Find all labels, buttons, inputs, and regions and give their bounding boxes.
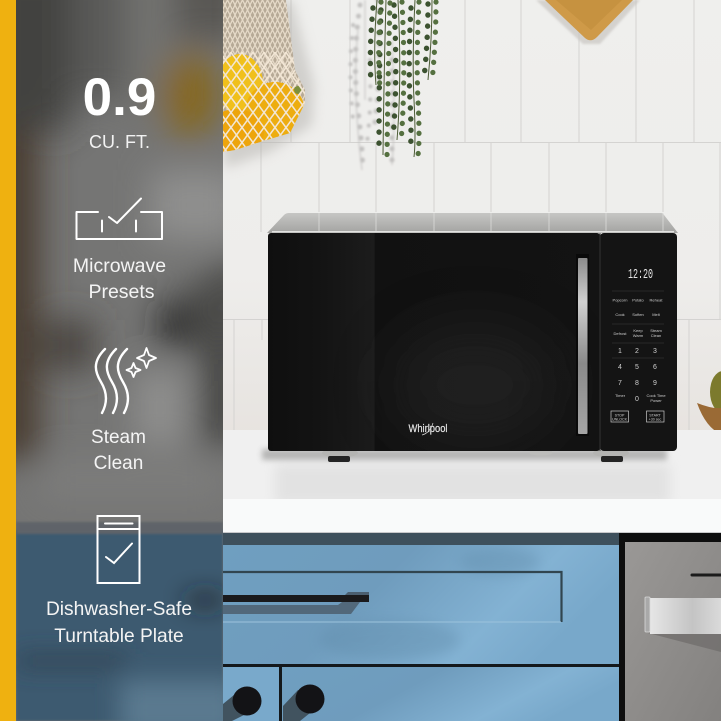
keypad labels: 2 xyxy=(635,348,639,355)
whirlpool logo: Whirlpool xyxy=(408,423,448,435)
icon: microwave presets xyxy=(76,198,162,239)
keypad labels: STOP xyxy=(615,414,625,418)
keypad labels: 8 xyxy=(635,380,639,387)
keypad labels: Power xyxy=(650,398,662,403)
keypad labels: Cook Time xyxy=(646,393,666,398)
cutting board xyxy=(536,0,640,44)
keypad labels: Soften xyxy=(632,312,644,317)
clock display: 12:20 xyxy=(628,267,653,283)
keypad labels: 9 xyxy=(653,380,657,387)
keypad labels: +30 sec xyxy=(649,418,662,422)
keypad labels: 1 xyxy=(618,348,622,355)
hanging plant xyxy=(370,0,436,157)
countertop xyxy=(223,430,721,534)
keypad labels xyxy=(612,298,666,422)
frosted background xyxy=(16,0,223,721)
keypad labels: Defrost xyxy=(614,331,627,336)
blue cabinets xyxy=(223,533,621,721)
capacity value: 0.9 xyxy=(83,68,156,127)
drawer handle xyxy=(223,592,369,614)
keypad labels: 0 xyxy=(635,396,639,403)
icon: dishwasher safe xyxy=(98,516,140,583)
lower doors xyxy=(223,667,619,721)
keypad labels: UNLOCK xyxy=(612,418,628,422)
keypad labels: Reheat xyxy=(650,298,663,302)
keypad labels: Melt xyxy=(652,312,661,317)
label: microwave presets: Microwave xyxy=(73,255,166,277)
hanging plant shadow xyxy=(350,0,394,170)
label: steam clean: Clean xyxy=(94,453,143,474)
label: dishwasher-safe turntable plate: Turntable Plate xyxy=(54,626,184,647)
door handle xyxy=(576,254,589,436)
label: microwave presets: Presets xyxy=(88,281,155,303)
keypad labels: Keep xyxy=(633,328,643,333)
microwave top xyxy=(267,213,678,233)
keypad labels: 7 xyxy=(618,380,622,387)
microwave door xyxy=(268,233,600,451)
control panel xyxy=(600,233,677,451)
icon: steam clean xyxy=(96,348,156,413)
keypad labels: 5 xyxy=(635,364,639,371)
microwave xyxy=(267,213,678,462)
keypad labels: Timer xyxy=(615,393,626,398)
net bag of lemons xyxy=(223,0,318,168)
knob xyxy=(232,686,262,716)
keypad labels: Warm xyxy=(633,333,644,338)
capacity unit: CU. FT. xyxy=(89,132,150,152)
panel: features xyxy=(16,0,223,721)
label: steam clean: Steam xyxy=(91,427,146,448)
kitchen scene photo xyxy=(208,0,721,721)
microwave feet xyxy=(322,448,629,462)
drawer inset xyxy=(223,572,562,622)
keypad labels: Popcorn xyxy=(613,298,627,302)
keypad labels: START xyxy=(649,414,662,418)
accent bar xyxy=(0,0,16,721)
tiled wall xyxy=(223,0,721,460)
keypad labels: Steam xyxy=(650,328,662,333)
keypad labels: 6 xyxy=(653,364,657,371)
keypad labels: Cook xyxy=(615,312,625,317)
keypad labels: 3 xyxy=(653,348,657,355)
knob xyxy=(296,684,324,714)
wooden bowl with fruit xyxy=(697,371,721,434)
keypad labels: Potato xyxy=(632,298,645,302)
keypad labels: Clean xyxy=(651,333,661,338)
dishwasher xyxy=(619,533,721,721)
label: dishwasher-safe turntable plate: Dishwasher-Safe xyxy=(46,599,192,620)
dishwasher handle xyxy=(650,598,721,634)
keypad labels: 4 xyxy=(618,364,622,371)
